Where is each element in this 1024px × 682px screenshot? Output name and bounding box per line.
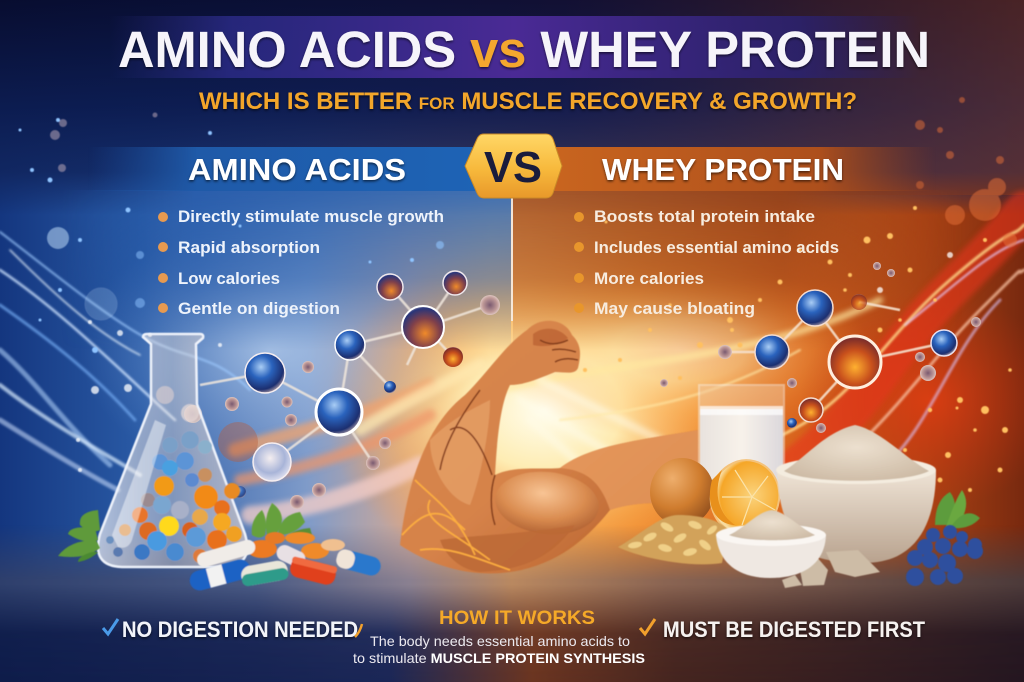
list: whey protein benefits: Boosts total protein intake [594,208,815,226]
callout: must be digested first: MUST BE DIGESTED FIRST [663,617,925,642]
icon: flask with amino acid balls [98,334,247,567]
icon: leaves right [935,490,980,530]
list: whey protein benefits: May cause bloating [594,300,755,318]
icon: small bowl of powder [716,510,826,578]
icon: powder chunks [782,550,880,588]
list: amino acids benefits: Directly stimulate muscle growth [178,208,444,226]
callout: no digestion needed: NO DIGESTION NEEDED [122,617,358,642]
icon: leaves left [58,510,100,562]
sparkles [18,97,1017,492]
title: AMINO ACIDS vs WHEY PROTEIN [118,21,930,78]
icon: bowl of whey powder [776,425,936,563]
icon: capsules and pills [187,532,383,593]
text: how it works explanation: The body needs essential amino acids to [370,633,630,649]
text: how it works explanation: to stimulate MUSCLE PROTEIN SYNTHESIS [353,650,645,666]
panel: whey protein background [513,191,918,342]
list: amino acids benefits [158,208,444,318]
icon: egg [650,458,714,526]
icon: oats [618,515,728,564]
header: amino acids: AMINO ACIDS [188,152,406,187]
flowing energy lines right [560,210,1024,490]
molecule left [184,271,500,509]
divider [511,196,513,321]
header: whey protein [548,147,936,191]
VS badge: VS [484,143,542,192]
list: whey protein benefits: More calories [594,270,704,288]
flowing energy lines center [235,300,880,515]
list: amino acids benefits: Low calories [178,270,280,288]
icon: orange half [703,452,787,542]
VS badge [465,134,562,198]
molecule right [660,262,981,433]
heading: how it works: HOW IT WORKS [439,608,595,629]
list: whey protein benefits [574,208,839,318]
list: whey protein benefits: Includes essential amino acids [594,239,839,257]
flowing energy lines left [0,232,250,490]
icon: flexed muscular arm [400,321,700,573]
text: how it works explanation [353,633,645,666]
panel: amino acids background [93,190,511,344]
list: amino acids benefits: Rapid absorption [178,239,320,257]
subtitle: WHICH IS BETTER FOR MUSCLE RECOVERY & GROWTH? [199,88,857,115]
icon: leaves center [252,503,312,540]
header: whey protein: WHEY PROTEIN [602,152,844,187]
icon: blueberries [906,525,983,586]
icon: glass of milk [699,385,784,499]
title band [110,16,920,78]
list: amino acids benefits: Gentle on digestion [178,300,340,318]
header: amino acids [88,147,478,191]
